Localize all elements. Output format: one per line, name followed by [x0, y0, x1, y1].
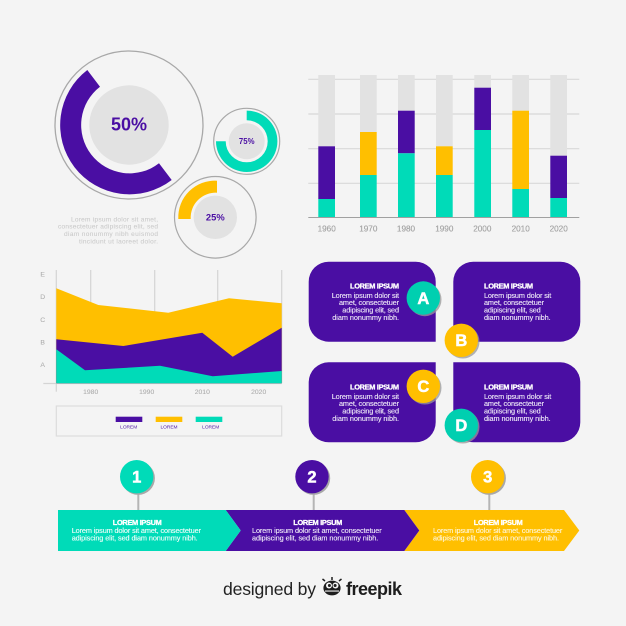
- card A: LOREM IPSUM: [350, 282, 399, 291]
- bar chart year labels: 2010: [512, 225, 530, 234]
- bar chart year labels: [318, 225, 568, 234]
- timeline step 1 marker: 1: [132, 468, 141, 486]
- card B: adipiscing elit, sed: [484, 306, 541, 314]
- timeline arrow 3: LOREM IPSUM: [474, 518, 523, 527]
- area chart y labels: E: [40, 272, 45, 278]
- bar: 2010: [512, 75, 529, 217]
- area chart x labels: 1990: [139, 389, 154, 396]
- timeline step 3 marker: [471, 460, 506, 511]
- area chart x labels: 2020: [251, 389, 266, 396]
- card D: amet, consectetuer: [484, 399, 545, 408]
- footer credit: designed by: [223, 579, 316, 599]
- area chart y labels: C: [40, 317, 45, 324]
- timeline arrow 1: adipiscing elit, sed diam nonummy nibh.: [72, 534, 198, 542]
- badge D: D: [455, 417, 467, 435]
- card B: amet, consectetuer: [484, 298, 545, 307]
- area chart legend: LOREM: [160, 425, 178, 431]
- timeline arrow 2: [226, 510, 419, 551]
- card C: LOREM IPSUM: [350, 383, 399, 392]
- badge C: [407, 370, 441, 404]
- card B: Lorem ipsum dolor sit: [484, 291, 551, 300]
- area chart legend: [56, 406, 282, 436]
- card B: LOREM IPSUM: [484, 282, 533, 291]
- timeline arrow 2: Lorem ipsum dolor sit amet, consectetuer: [252, 526, 382, 535]
- card A: amet, consectetuer: [339, 298, 400, 307]
- area chart x labels: 2010: [195, 389, 210, 396]
- donut caption text: consectetuer adipiscing elit, sed: [58, 224, 158, 231]
- footer credit: [223, 577, 403, 599]
- card B: diam nonummy nibh.: [484, 313, 551, 322]
- card C: adipiscing elit, sed: [342, 406, 399, 416]
- donut chart: 50%: [55, 51, 203, 199]
- area chart y labels: D: [40, 294, 45, 301]
- card D: [453, 362, 580, 442]
- card C: Lorem ipsum dolor sit: [332, 392, 399, 401]
- timeline arrow 3: Lorem ipsum dolor sit amet, consectetuer: [433, 526, 563, 535]
- badge A: A: [417, 290, 429, 308]
- area chart legend: LOREM: [120, 425, 137, 431]
- bar chart year labels: 1960: [318, 225, 336, 234]
- timeline arrow 3: [404, 510, 579, 551]
- bar: 1980: [398, 75, 415, 217]
- footer credit: freepik: [346, 579, 403, 599]
- icon: freepik bee logo: [322, 577, 342, 595]
- donut caption text: diam nonummy nibh euismod: [64, 231, 158, 238]
- area chart legend: LOREM: [202, 425, 219, 431]
- bar: 1960: [318, 75, 335, 217]
- timeline arrow 1: Lorem ipsum dolor sit amet, consectetuer: [72, 526, 202, 535]
- card D: diam nonummy nibh.: [484, 414, 551, 423]
- timeline arrow 1: LOREM IPSUM: [113, 518, 162, 527]
- bar chart year labels: 1980: [397, 225, 416, 234]
- area chart: [40, 270, 282, 396]
- card B: [453, 262, 580, 342]
- area chart y labels: A: [40, 362, 45, 369]
- donut chart: 50%: 50%: [111, 115, 147, 135]
- donut caption text: Lorem ipsum dolor sit amet,: [71, 216, 158, 223]
- card A: [309, 262, 436, 342]
- card C: diam nonummy nibh.: [332, 414, 399, 423]
- card D: Lorem ipsum dolor sit: [484, 392, 551, 401]
- card C: [309, 362, 436, 442]
- bar: 2000: [474, 75, 491, 217]
- timeline arrow 2: LOREM IPSUM: [293, 518, 342, 527]
- area chart x labels: 1980: [83, 389, 98, 396]
- card A: Lorem ipsum dolor sit: [332, 291, 399, 300]
- badge B: B: [455, 332, 467, 350]
- bar: 1990: [436, 75, 453, 217]
- timeline arrow 3: adipiscing elit, sed diam nonummy nibh.: [433, 534, 559, 542]
- donut chart: 25%: 25%: [206, 212, 225, 223]
- badge C: C: [417, 378, 429, 396]
- bar: 2020: [550, 75, 567, 217]
- badge D: [445, 409, 479, 443]
- area chart y labels: [40, 272, 45, 369]
- area chart y labels: B: [40, 340, 45, 346]
- timeline arrow 1: [58, 510, 241, 551]
- bar chart year labels: 1990: [435, 225, 454, 234]
- donut caption text: tincidunt ut laoreet dolor.: [79, 238, 158, 245]
- card D: LOREM IPSUM: [484, 383, 533, 392]
- timeline step 1 marker: [120, 460, 155, 511]
- bar chart year labels: 2020: [550, 225, 568, 234]
- timeline step 3 marker: 3: [483, 468, 492, 486]
- timeline arrow 2: adipiscing elit, sed diam nonummy nibh.: [252, 534, 378, 542]
- area chart x labels: [83, 389, 266, 396]
- card A: adipiscing elit, sed: [342, 306, 399, 314]
- donut chart: 25%: [174, 176, 256, 258]
- bar chart year labels: 1970: [359, 225, 378, 234]
- card A: diam nonummy nibh.: [332, 313, 399, 322]
- bar chart year labels: 2000: [473, 225, 492, 234]
- timeline step 2 marker: 2: [307, 468, 317, 486]
- donut chart: 75%: 75%: [239, 137, 255, 146]
- timeline step 2 marker: [295, 460, 330, 511]
- bar: 1970: [360, 75, 377, 217]
- card C: amet, consectetuer: [339, 399, 400, 408]
- card D: adipiscing elit, sed: [484, 406, 541, 416]
- stacked bar chart: [308, 75, 579, 234]
- badge A: [407, 281, 441, 316]
- donut caption text: [58, 216, 158, 245]
- donut chart: 75%: [214, 108, 280, 174]
- badge B: [445, 324, 479, 358]
